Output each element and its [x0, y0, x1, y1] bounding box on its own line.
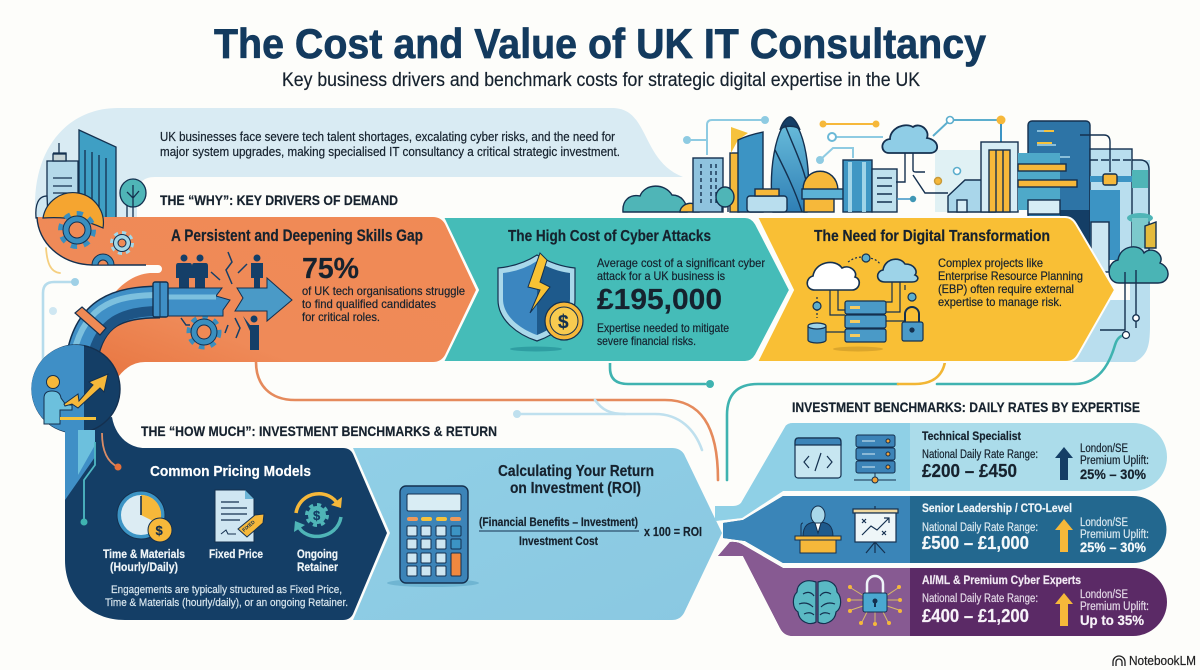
text: digital transformation: (EBP) often require external — [938, 282, 1074, 296]
icon: clock and coin — [117, 491, 172, 542]
text: digital transformation — [938, 256, 1083, 309]
text: AI experts — [922, 573, 1081, 626]
label: ongoing retainer: Retainer — [297, 562, 338, 574]
text: AI experts: £400 – £1,200 — [922, 606, 1029, 626]
icon: retainer cycle — [294, 494, 342, 536]
text: AI experts: National Daily Rate Range: — [922, 593, 1038, 605]
icon: circuit lock — [847, 576, 902, 626]
text: skills gap: for critical roles. — [302, 310, 380, 324]
heading: benchmarks: INVESTMENT BENCHMARKS: DAILY RATES BY EXPERTISE — [792, 399, 1140, 415]
text: technical uplift: Premium Uplift: — [1080, 455, 1149, 467]
text: skills gap — [302, 284, 465, 324]
text: digital transformation: expertise to manage risk. — [938, 295, 1062, 309]
panel: orange skills gap band — [37, 193, 476, 380]
panel: intro speech bubble — [35, 108, 683, 225]
label: fixed price: Fixed Price — [209, 549, 263, 561]
stat: 75%: 75% — [302, 253, 359, 285]
label: ongoing retainer: Ongoing — [297, 549, 338, 561]
icon: break arrow — [235, 278, 292, 321]
icon: people — [176, 254, 263, 350]
icon: shield with coin: $ — [558, 312, 569, 333]
text: senior uplift: 25% – 30% — [1080, 539, 1147, 555]
ROI formula — [479, 517, 702, 548]
icon: retainer cycle: $ — [313, 508, 321, 523]
heading: pricing: Common Pricing Models — [150, 463, 311, 480]
text: pricing note: Time & Materials (hourly/daily), or an ongoing Retainer. — [105, 597, 348, 609]
heading: digital transformation: The Need for Digital Transformation — [814, 228, 1050, 245]
text: technical specialist: £200 – £450 — [922, 461, 1017, 481]
text: senior leadership: National Daily Rate Range: — [922, 522, 1038, 534]
text: pricing note: Engagements are typically structured as Fixed Price, — [111, 584, 342, 596]
text: technical specialist — [922, 429, 1038, 481]
text: AI uplift: Up to 35% — [1080, 612, 1145, 628]
icon: shield with coin — [498, 253, 583, 352]
panel: yellow digital transformation band — [757, 217, 1115, 362]
illustration: broken pipe with people and arrow — [74, 252, 292, 358]
arrow: uplift — [1055, 447, 1073, 480]
text: senior leadership: £500 – £1,000 — [922, 533, 1029, 553]
intro text: UK businesses face severe tech talent shortages, excalating cyber risks, and the need for — [160, 130, 615, 144]
text: digital transformation: Complex projects like — [938, 256, 1043, 270]
ROI formula: x 100 = ROI — [644, 524, 702, 539]
panel: light blue ROI — [353, 448, 722, 620]
text: pricing note — [105, 584, 348, 609]
ROI formula: Investment Cost — [519, 536, 598, 548]
arrow: uplift — [1055, 593, 1073, 626]
icon: yellow hill — [43, 193, 103, 228]
text: senior uplift: Premium Uplift: — [1080, 529, 1149, 541]
heading: ROI: Calculating Your Return — [498, 463, 654, 480]
NotebookLM watermark: NotebookLM — [1129, 654, 1196, 668]
panel: technical specialist row — [715, 423, 1167, 521]
title: The Cost and Value of UK IT Consultancy — [214, 20, 987, 67]
text: technical uplift: London/SE — [1080, 443, 1128, 455]
panel: navy pricing models — [31, 345, 387, 620]
text: senior uplift: London/SE — [1080, 517, 1128, 529]
illustration: left skyline — [36, 130, 153, 237]
text: technical uplift — [1080, 443, 1149, 482]
icon: consultant circle — [31, 345, 122, 526]
heading: skills gap: A Persistent and Deepening Skills Gap — [171, 227, 423, 245]
subtitle: Key business drivers and benchmark costs for strategic digital expertise in the UK — [282, 70, 920, 91]
icon: broken gear — [189, 317, 219, 347]
icon: server — [854, 435, 896, 483]
heading: ROI — [498, 463, 654, 497]
connector nodes — [49, 278, 1130, 418]
ROI formula: (Financial Benefits – Investment) — [479, 517, 638, 529]
panel: senior leadership row — [723, 496, 1166, 563]
text: AI experts: AI/ML & Premium Cyber Experts — [922, 573, 1081, 587]
illustration: right city skyline — [623, 116, 1168, 362]
icon: calculator — [387, 486, 479, 587]
panel: teal cyber attacks band — [443, 217, 790, 362]
label: ongoing retainer — [297, 549, 338, 574]
icon: brain — [793, 581, 841, 624]
label: time and materials: Time & Materials — [103, 549, 185, 561]
icon: clock and coin: $ — [156, 523, 164, 538]
icon: gears — [61, 214, 132, 265]
text: technical specialist: National Daily Rate Range: — [922, 449, 1038, 461]
heading: why: THE “WHY”: KEY DRIVERS OF DEMAND — [160, 192, 398, 208]
text: cyber mitigation: severe financial risks. — [597, 334, 696, 348]
connector lines — [43, 248, 1126, 480]
text: skills gap: to find qualified candidates — [302, 297, 436, 311]
icon: fixed price document: FIXED — [241, 519, 257, 534]
label: time and materials — [103, 549, 185, 574]
icon: cloud server network — [807, 254, 923, 352]
text: cyber mitigation — [597, 321, 729, 348]
intro text: major system upgrades, making specialised IT consultancy a critical strategic investment. — [160, 145, 620, 159]
heading: cyber attacks: The High Cost of Cyber Attacks — [508, 228, 711, 245]
text: cyber cost intro: Average cost of a significant cyber — [597, 256, 765, 270]
text: senior leadership — [922, 501, 1072, 553]
text: cyber mitigation: Expertise needed to mitigate — [597, 321, 729, 335]
text: senior uplift — [1080, 517, 1149, 555]
text: digital transformation: Enterprise Resource Planning — [938, 269, 1083, 283]
text: skills gap: of UK tech organisations struggle — [302, 284, 465, 298]
text: AI uplift — [1080, 589, 1149, 628]
arrow: uplift — [1055, 519, 1073, 552]
text: AI uplift: London/SE — [1080, 589, 1128, 601]
icon: cracks — [181, 252, 247, 338]
heading: ROI: on Investment (ROI) — [510, 480, 641, 497]
stat: £195,000: £195,000 — [597, 284, 722, 316]
icon: speaker at podium — [795, 506, 841, 553]
text: senior leadership: Senior Leadership / CTO-Level — [922, 501, 1072, 515]
text: technical uplift: 25% – 30% — [1080, 466, 1147, 482]
intro text — [160, 130, 620, 159]
panel: AI and cyber experts row — [718, 542, 1167, 636]
icon: fixed price document — [215, 490, 264, 542]
heading: how much: THE “HOW MUCH”: INVESTMENT BENCHMARKS & RETURN — [141, 423, 497, 439]
text: cyber cost intro — [597, 256, 765, 283]
label: time and materials: (Hourly/Daily) — [110, 562, 178, 574]
text: AI uplift: Premium Uplift: — [1080, 601, 1149, 613]
icon: code window — [795, 438, 841, 478]
text: technical specialist: Technical Specialist — [922, 429, 1021, 443]
text: cyber cost intro: attack for a UK business is — [597, 269, 725, 283]
icon: chart board — [853, 506, 898, 553]
icon: pipe — [74, 282, 230, 358]
